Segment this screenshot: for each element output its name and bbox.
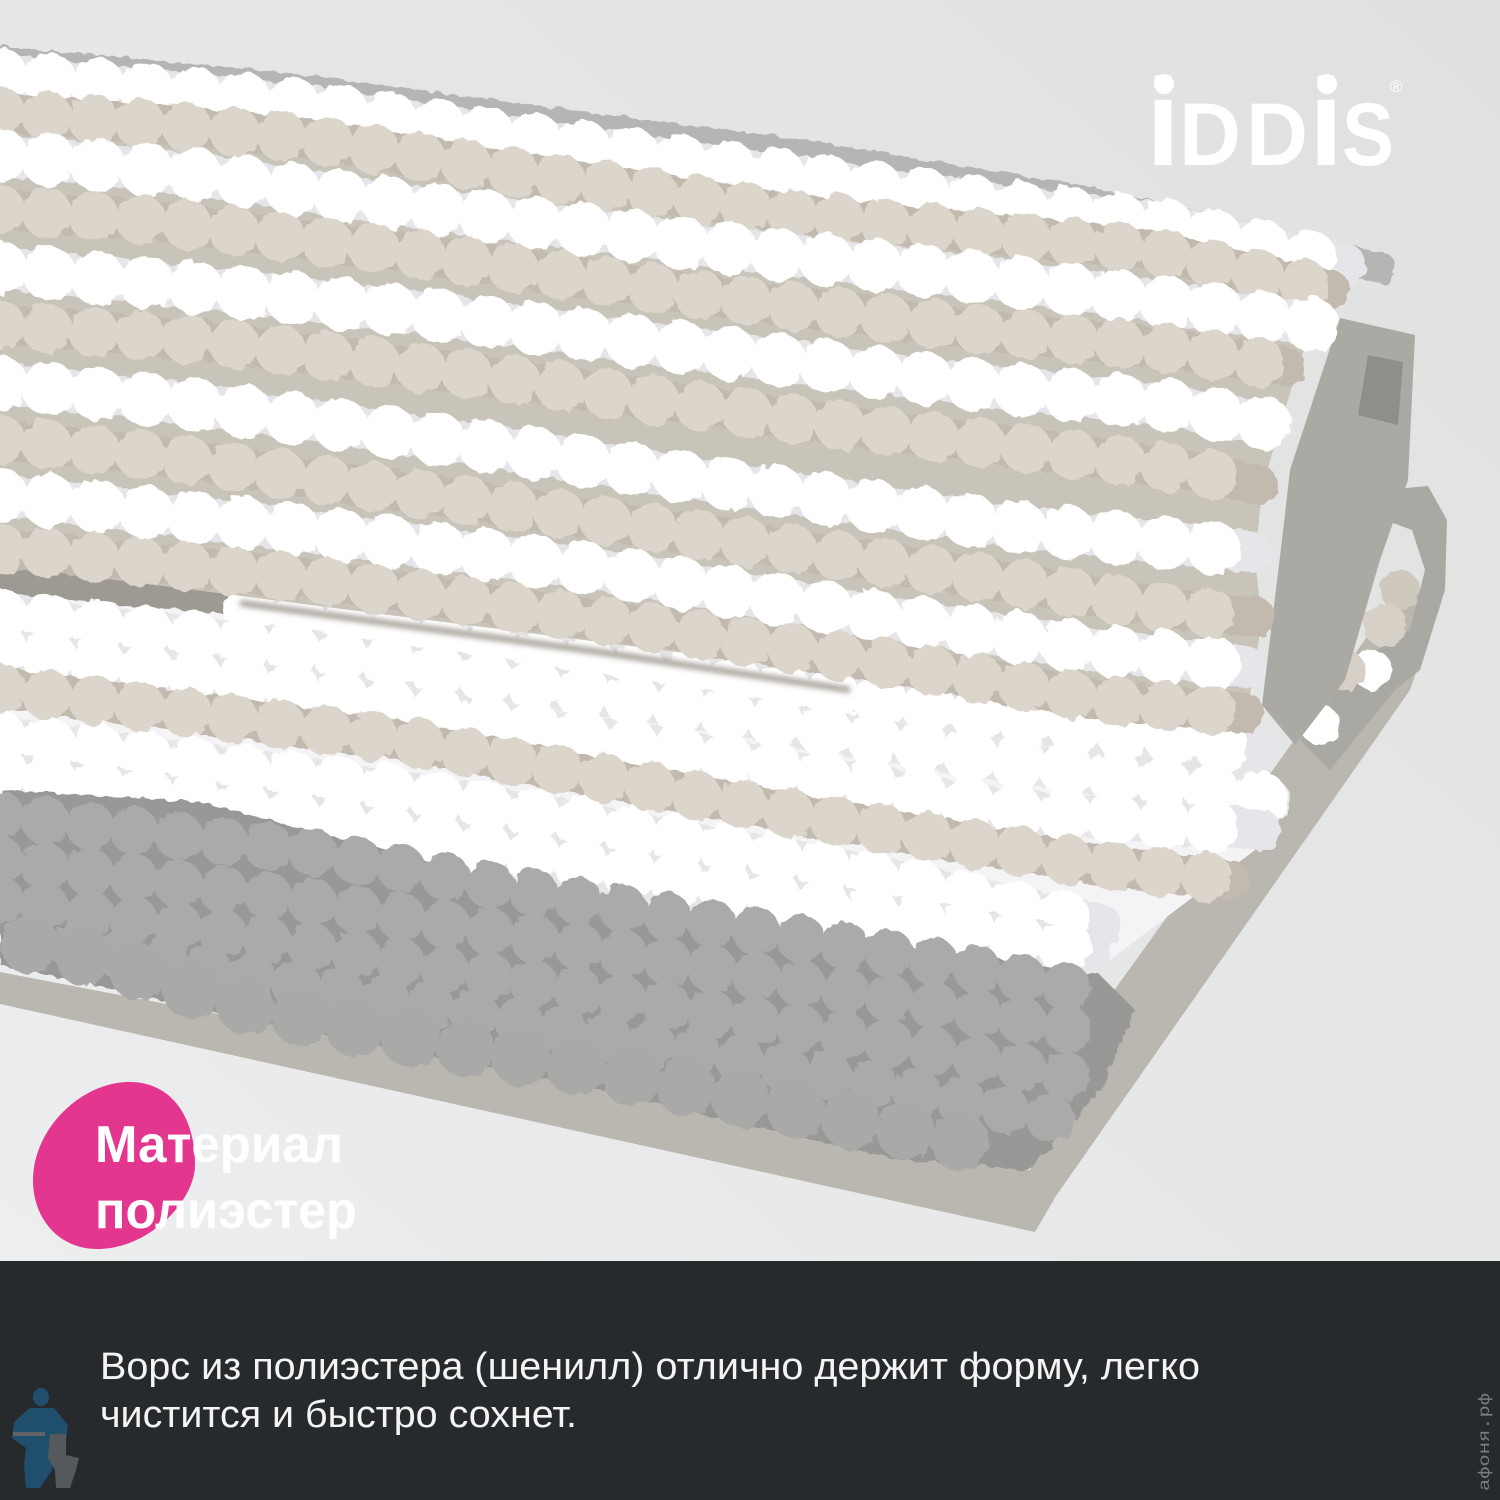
- gray border stripe: [0, 790, 1135, 1170]
- heading: material polyester: Материал: [95, 1116, 343, 1174]
- icon: plumber mascot with toilet: [12, 1388, 79, 1488]
- logo: IDDIS: S: [1342, 84, 1394, 184]
- watermark: афоня.рф: [1476, 1392, 1494, 1491]
- caption text: Ворс из полиэстера (шенилл) отлично держит форму, легко: [100, 1346, 1200, 1388]
- soft shadow under the roll: [240, 603, 850, 690]
- pompoms seen through the loop: [1300, 570, 1420, 745]
- logo: IDDIS: i: [1146, 55, 1180, 192]
- heading: material polyester: [95, 1116, 357, 1240]
- fabric backing of lower mat: [0, 590, 1444, 1232]
- lower mat white body: [0, 585, 1265, 960]
- fabric loop at right edge: [1300, 486, 1447, 770]
- fabric edge of the roll: [1262, 318, 1415, 745]
- logo: IDDIS: D: [1179, 84, 1241, 184]
- caption text: чистится и быстро сохнет.: [100, 1394, 577, 1436]
- dark caption panel: [0, 1261, 1500, 1500]
- lower mat stripes: [0, 578, 1270, 950]
- logo: IDDIS: ®: [1390, 77, 1403, 96]
- logo: IDDIS: D: [1246, 84, 1308, 184]
- rolled mat underlay: [0, 80, 1340, 725]
- dark fold in the fabric edge: [1358, 355, 1403, 425]
- logo: IDDIS: i: [1309, 55, 1343, 192]
- caption text: [100, 1346, 1200, 1436]
- rolled mat stripes: [0, 62, 1380, 713]
- pink blob badge: [33, 1082, 195, 1249]
- mat photograph: [0, 62, 1447, 1232]
- heading: material polyester: полиэстер: [95, 1182, 357, 1240]
- logo: IDDIS: [1146, 55, 1403, 192]
